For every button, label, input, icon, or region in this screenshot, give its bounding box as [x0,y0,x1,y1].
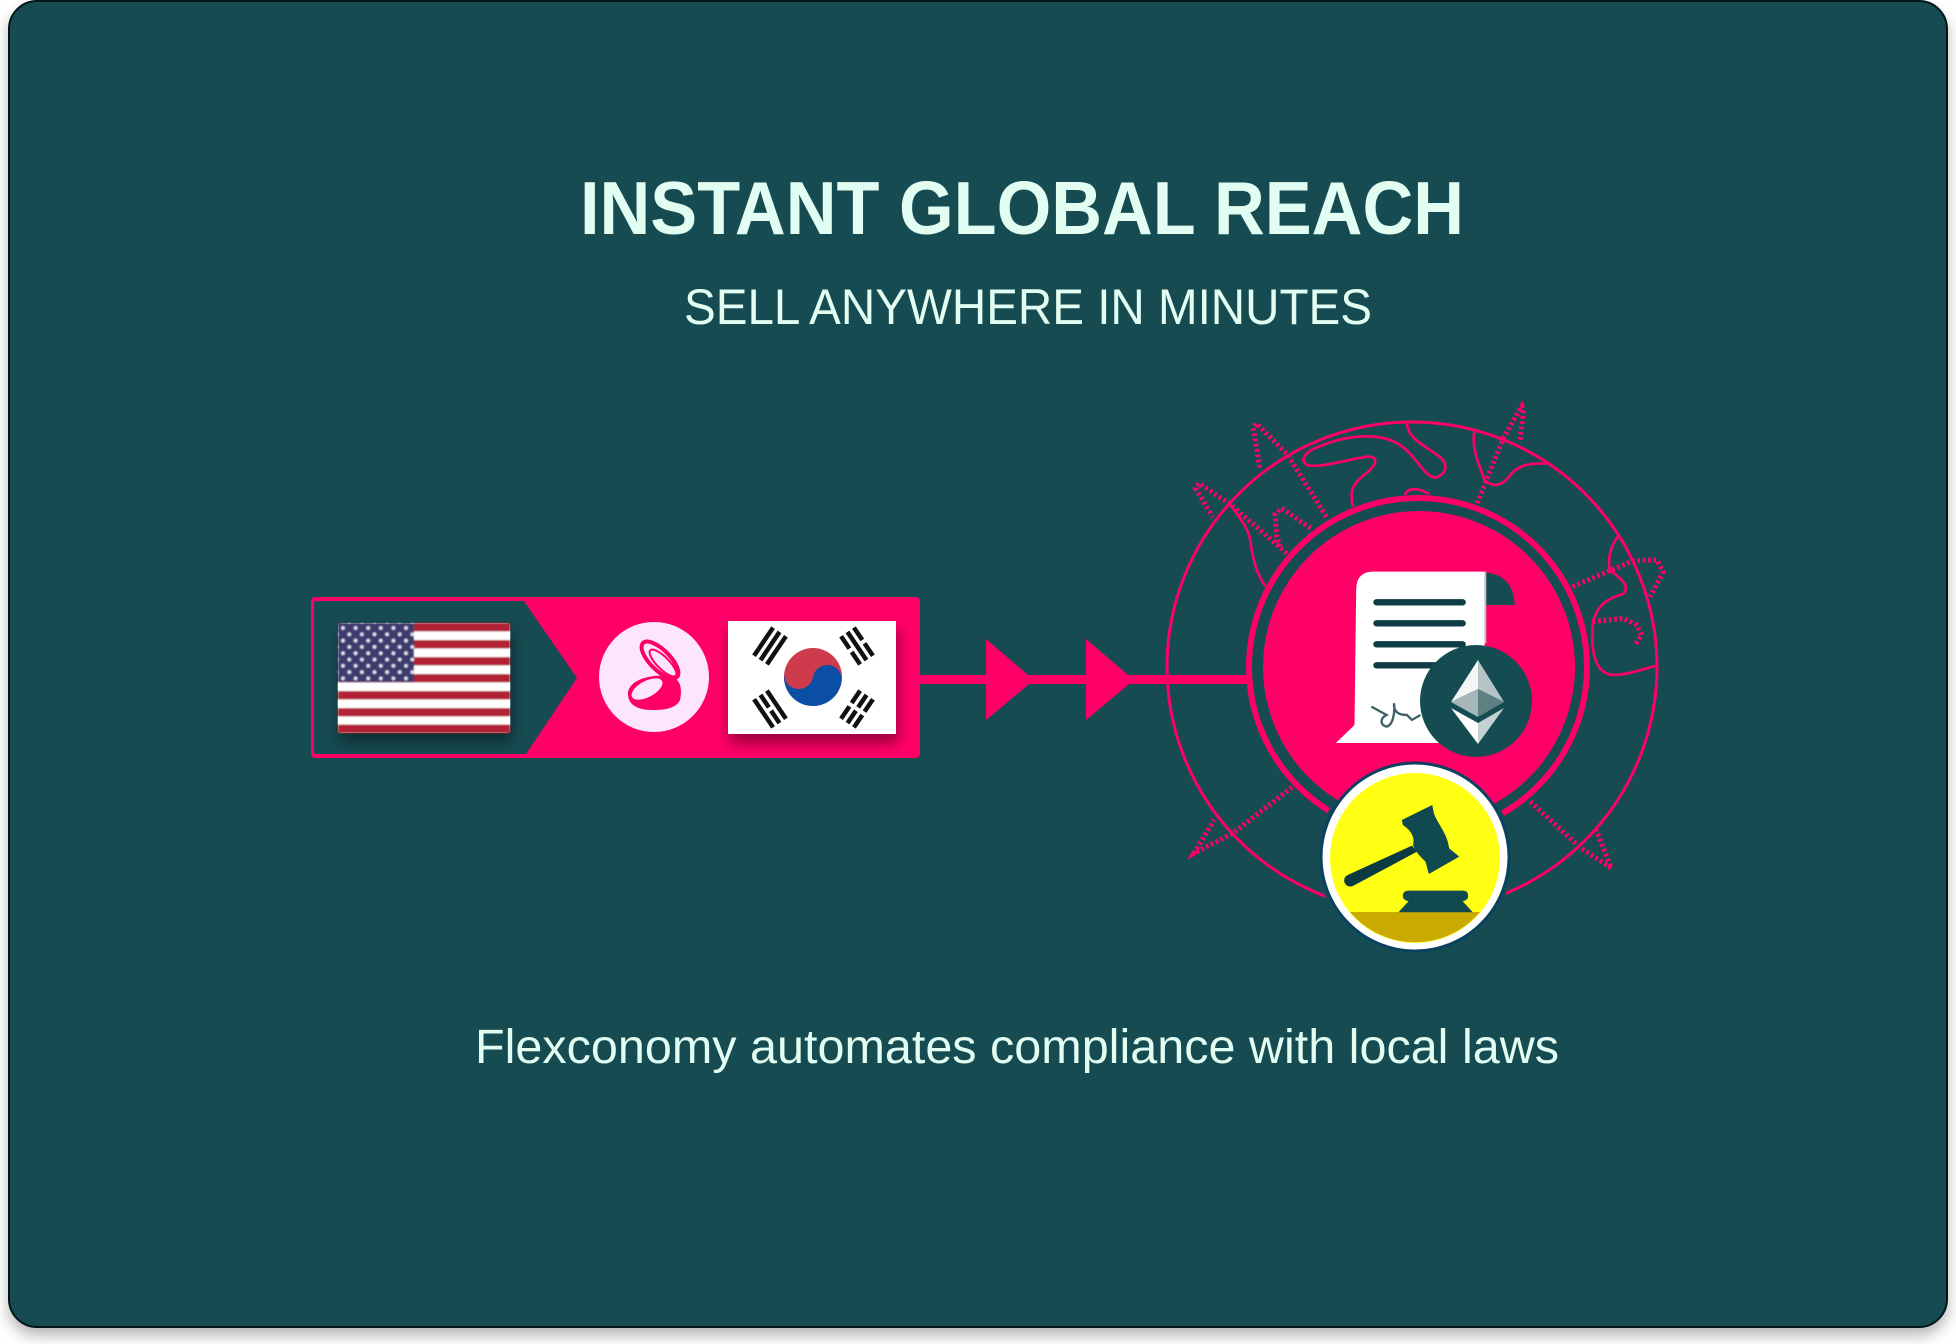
continents upper [1196,406,1663,675]
arrow: connector to globe [920,639,1250,720]
globe outer circle [1167,422,1657,912]
ring [1249,498,1587,836]
icon: logo circle [599,622,709,732]
signature [1371,703,1420,727]
icon: South Korea flag [728,621,896,734]
pink disc [1263,511,1575,823]
icon: US flag [338,623,510,733]
title: INSTANT GLOBAL REACH [580,166,1464,250]
globe illustration [1167,406,1663,955]
dotted lines lower [1194,787,1611,868]
subtitle: SELL ANYWHERE IN MINUTES [684,279,1372,335]
icon: contract document [1336,572,1515,743]
banner panel [311,597,920,758]
icon: gavel badge [1321,763,1509,951]
banner: flags and swap [311,597,920,758]
caption: Flexconomy automates compliance with local laws [475,1021,1559,1074]
icon: ethereum badge [1420,645,1532,757]
